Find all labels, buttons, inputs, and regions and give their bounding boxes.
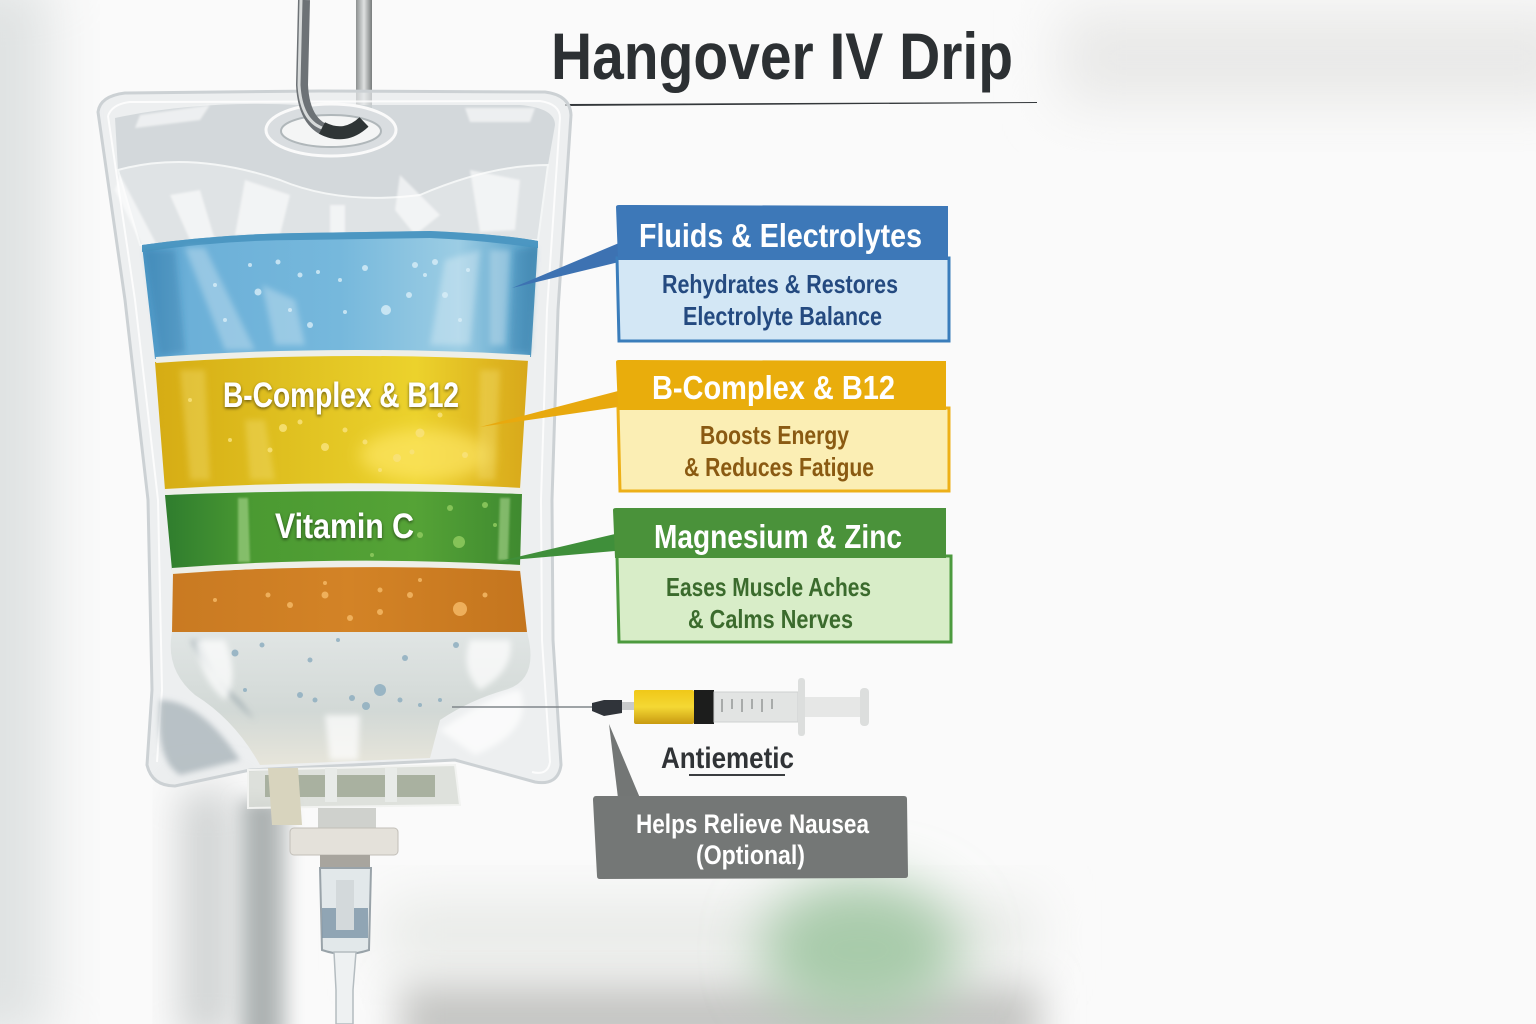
icon: hook [299,0,364,133]
header [613,508,946,558]
bubbles [213,259,470,328]
callout: fluids & electrolytes: Electrolyte Balance [683,301,882,331]
highlight streaks [115,105,535,352]
callout: b-complex & b12: & Reduces Fatigue [684,452,874,482]
header [616,360,946,410]
bag port and drip chamber [248,765,460,1024]
callout: fluids & electrolytes: Rehydrates & Restores [662,269,898,299]
callout: helps relieve nausea [593,724,908,879]
icon: syringe [452,678,869,736]
hang hole [266,104,396,156]
header [616,205,948,260]
pointer [500,534,615,561]
bag label: vitamin c: Vitamin C [275,507,414,546]
callout: magnesium & zinc [500,508,951,642]
callout: helps relieve nausea: Helps Relieve Nausea [636,809,870,839]
body [617,258,949,341]
layer: green vitamin c [165,491,522,570]
callout: magnesium & zinc: Eases Muscle Aches [666,572,871,602]
callout: b-complex & b12 [480,360,949,491]
bag label: b-complex: B-Complex & B12 [223,376,459,415]
iv bag [98,91,571,786]
pole rod [356,0,372,110]
body [617,556,951,642]
box [593,796,908,879]
callout: fluids & electrolytes [512,205,949,341]
bag seal area [115,104,555,198]
pointer [512,243,619,288]
callout: fluids & electrolytes: Fluids & Electrolytes [639,217,922,254]
layer: clear lower [171,632,531,765]
label: antiemetic: Antiemetic [661,742,794,775]
title: Hangover IV Drip [551,19,1013,93]
callout: helps relieve nausea: (Optional) [696,840,805,870]
bag body [98,91,571,786]
callout: b-complex & b12: B-Complex & B12 [652,369,895,406]
layer: blue fluids [142,231,538,359]
layer: yellow b-complex [155,355,528,490]
separator bands [156,353,530,571]
callout: b-complex & b12: Boosts Energy [700,420,849,450]
pointer [480,391,618,427]
body [618,408,949,491]
pointer [609,724,640,798]
callout: magnesium & zinc: & Calms Nerves [688,604,853,634]
callout: magnesium & zinc: Magnesium & Zinc [654,518,902,555]
layer: orange [172,567,527,632]
